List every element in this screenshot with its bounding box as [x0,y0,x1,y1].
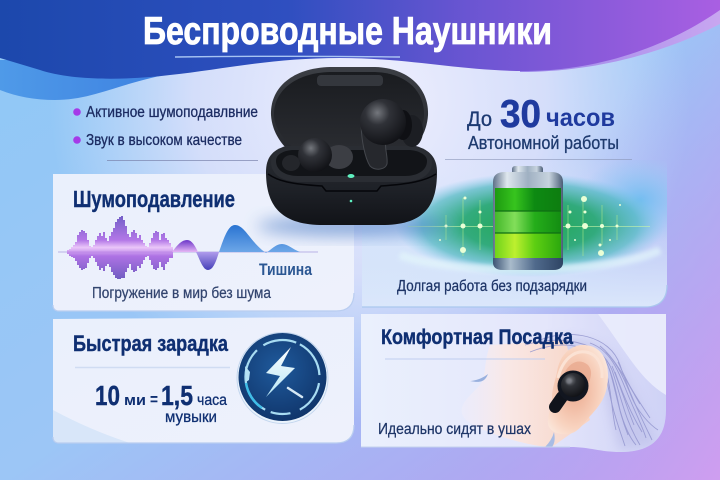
indicator lights [348,174,354,202]
heading: battery hours: Автономной работы [468,133,619,153]
earbuds charging case [257,67,447,236]
battery glow [395,173,665,277]
caption: noise cancelling: Погружение в мир без шума [92,285,271,302]
ear illustration [548,345,608,434]
heading: noise cancelling: Шумоподавление [73,186,235,212]
heading: battery hours [445,93,632,160]
header band [0,0,720,100]
stat: charging time [95,380,227,426]
heading: battery hours: часов [546,104,615,132]
heading: battery hours: До [467,108,492,131]
hair haze [542,336,652,449]
bullet list: Звук в высоком качестве [86,132,242,149]
sound wave chart [58,216,318,279]
heading: comfortable fit: Комфортная Посадка [381,326,573,349]
stat: charging time: 10 [95,380,120,411]
panel: fast charging [53,317,354,443]
heading: battery hours: 30 [500,93,541,136]
face [474,340,590,446]
stat: charging time: ми [124,392,146,409]
panel: comfortable fit [361,314,666,452]
right earbud [360,99,423,169]
stat: charging time: мувыки [165,409,217,426]
stat: charging time: часа [197,392,227,409]
bullet list [73,104,258,160]
caption: comfortable fit: Идеально сидят в ушах [378,421,531,438]
case lid [271,67,428,155]
title: Беспроводные Наушники [143,10,552,53]
caption: battery: Долгая работа без подзарядки [397,278,587,295]
blue haze [596,164,667,236]
hair [525,334,658,446]
icon: lightning badge [232,327,333,427]
stat: charging time: = [150,390,158,409]
case base [266,146,437,225]
panel: noise cancelling [53,174,354,311]
sparkles [408,196,650,256]
icon: battery [493,166,563,270]
icon: earbud in ear [555,370,588,407]
heading: fast charging: Быстрая зарадка [73,331,229,356]
panel: battery life [362,100,668,308]
label: silence: Тишина [259,260,312,279]
left earbud [282,138,353,172]
bullet list: Активное шумоподавлвние [86,104,258,121]
stat: charging time: 1,5 [161,380,193,411]
